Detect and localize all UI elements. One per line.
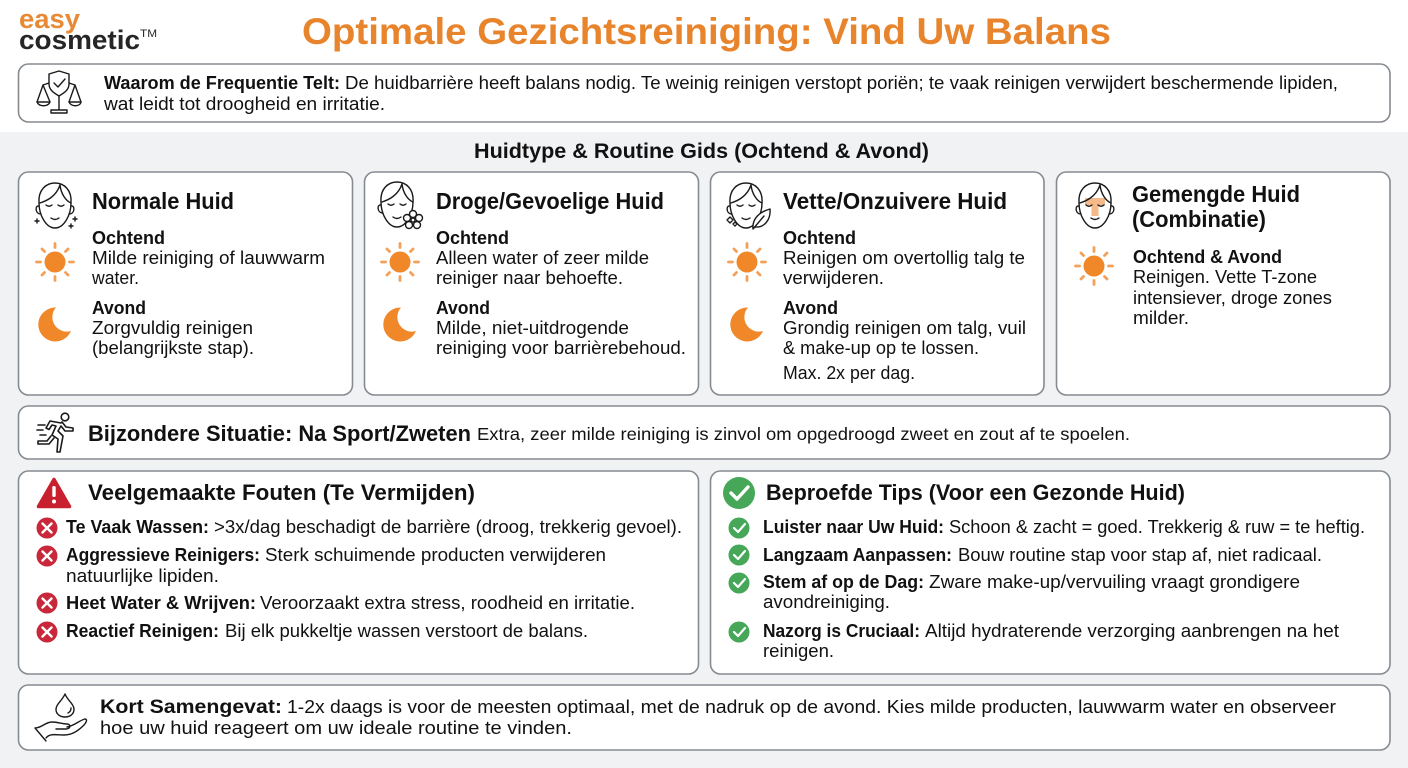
icon: shield and scales [37,71,81,113]
text: ochtend: Ochtend [783,228,856,248]
item: heet water en wrijven [36,592,635,614]
panel: bijzondere situatie [18,406,1390,459]
text: ochtend en avond: intensiever, droge zones [1133,288,1332,308]
text: na sport: Extra, zeer milde reiniging is zinvol om opgedroogd zweet en zout af te spoelen. [477,424,1130,444]
icon: sun [1076,248,1112,284]
icon: sun [728,244,766,280]
text: samenvatting [100,697,1336,738]
text: na sport: Bijzondere Situatie: Na Sport/Zweten [88,421,471,446]
item: langzaam aanpassen: Langzaam Aanpassen: [763,545,952,565]
heading: tips: Beproefde Tips (Voor een Gezonde Huid) [766,480,1185,505]
item: luister naar uw huid: Luister naar Uw Huid: [763,517,944,537]
item: reactief reinigen: Bij elk pukkeltje wassen verstoort de balans. [225,621,588,641]
text: ochtend: Reinigen om overtollig talg te [783,248,1025,268]
item: stem af op de dag [728,572,1300,612]
text: avond: Zorgvuldig reinigen [92,318,253,338]
text: waarom: De huidbarrière heeft balans nodig. Te weinig reinigen verstopt poriën; te vaak reinigen verwijdert beschermende lipiden, [345,73,1338,93]
text: na sport [88,421,1130,446]
text: avond: Milde, niet-uitdrogende [436,318,629,338]
panel: gemengde huid [1056,172,1390,395]
icon: moon [730,307,763,341]
item: aggressieve reinigers: natuurlijke lipiden. [66,566,219,586]
logo: cosmetic [19,25,140,55]
item: luister naar uw huid: Schoon & zacht = goed. Trekkerig & ruw = te heftig. [949,517,1365,537]
text: ochtend: Ochtend [436,228,509,248]
text: waarom [103,73,1338,114]
text: avond: Max. 2x per dag. [783,363,915,383]
item: stem af op de dag: avondreiniging. [763,592,890,612]
icon: hand with water drop [35,694,87,741]
text: avond [92,298,254,358]
text: avond: Grondig reinigen om talg, vuil [783,318,1026,338]
icon: sun [382,244,418,280]
item: reactief reinigen [36,621,588,642]
text: waarom: wat leidt tot droogheid en irritatie. [103,94,385,114]
panel: droge/gevoelige huid [364,172,698,395]
logo: easy [19,4,80,34]
text: ochtend: Ochtend [92,228,165,248]
text: avond: (belangrijkste stap). [92,338,254,358]
panel: kort samengevat [18,685,1390,750]
heading: vette/onzuivere huid: Vette/Onzuivere Huid [783,188,1007,214]
icon: face with flower [378,182,422,228]
icon: moon [383,307,416,341]
text: ochtend en avond: milder. [1133,308,1189,328]
icon: large check [723,477,755,509]
text: samenvatting: hoe uw huid reageert om uw ideale routine te vinden. [100,718,572,738]
heading: gemengde huid [1132,181,1300,232]
section heading: Huidtype & Routine Gids (Ochtend & Avond) [474,140,929,163]
text: ochtend [783,228,1025,288]
item: nazorg is cruciaal [728,621,1339,661]
item: luister naar uw huid [728,517,1365,538]
text: avond: reiniging voor barrièrebehoud. [436,338,686,358]
panel: normale huid [18,172,352,395]
text: ochtend: water. [91,268,139,288]
heading: droge/gevoelige huid: Droge/Gevoelige Huid [436,188,664,214]
text: samenvatting: 1-2x daags is voor de meesten optimaal, met de nadruk op de avond. Kies milde producten, lauwwarm water en observeer [287,697,1336,717]
item: stem af op de dag: Zware make-up/vervuiling vraagt grondigere [929,572,1300,592]
item: nazorg is cruciaal: Altijd hydraterende verzorging aanbrengen na het [925,621,1339,641]
item: reactief reinigen: Reactief Reinigen: [66,621,219,641]
logo: TM [140,28,157,40]
text: avond: Avond [92,298,146,318]
item: aggressieve reinigers: Aggressieve Reinigers: [66,545,260,565]
item: nazorg is cruciaal: Nazorg is Cruciaal: [763,621,920,641]
icon: moon [38,307,71,341]
item: heet water en wrijven: Veroorzaakt extra stress, roodheid en irritatie. [260,593,635,613]
heading: gemengde huid: (Combinatie) [1132,206,1266,232]
text: samenvatting: Kort Samengevat: [100,697,282,718]
text: ochtend: Milde reiniging of lauwwarm [92,248,325,268]
text: avond: Avond [783,298,838,318]
item: stem af op de dag: Stem af op de Dag: [763,572,924,592]
text: ochtend [91,228,325,288]
icon: face with t-zone [1076,183,1114,228]
item: te vaak wassen: Te Vaak Wassen: [66,517,209,537]
text: avond: & make-up op te lossen. [783,338,979,358]
text: ochtend en avond: Reinigen. Vette T-zone [1133,267,1317,287]
item: te vaak wassen: >3x/dag beschadigt de barrière (droog, trekkerig gevoel). [214,517,682,537]
text: ochtend: Alleen water of zeer milde [436,248,649,268]
icon: runner [37,413,73,452]
icon: face with sparkles [35,183,77,228]
panel: waarom de frequentie telt [18,64,1390,122]
text: avond [436,298,686,358]
item: nazorg is cruciaal: reinigen. [763,641,834,661]
item: aggressieve reinigers: Sterk schuimende producten verwijderen [265,545,606,565]
logo [19,4,157,55]
text: avond: Avond [436,298,490,318]
text: avond [783,298,1026,383]
text: ochtend: verwijderen. [783,268,884,288]
item: langzaam aanpassen: Bouw routine stap voor stap af, niet radicaal. [958,545,1322,565]
panel: beproefde tips [710,471,1390,674]
heading: gemengde huid: Gemengde Huid [1132,181,1300,207]
panel: vette/onzuivere huid [710,172,1044,395]
text: ochtend en avond: Ochtend & Avond [1133,247,1282,267]
icon: sun [36,244,74,280]
title: Optimale Gezichtsreiniging: Vind Uw Balans [302,11,1111,52]
item: te vaak wassen [36,517,682,538]
text: ochtend [436,228,649,288]
item: heet water en wrijven: Heet Water & Wrijven: [66,593,256,613]
text: ochtend en avond [1133,247,1332,328]
item: aggressieve reinigers [36,545,606,586]
icon: warning triangle [38,480,70,506]
heading: fouten: Veelgemaakte Fouten (Te Vermijden) [88,480,475,505]
text: ochtend: reiniger naar behoefte. [436,268,623,288]
heading: normale huid: Normale Huid [92,188,234,214]
item: langzaam aanpassen [728,544,1322,566]
panel: veelgemaakte fouten [18,471,698,674]
icon: face with leaf [727,183,770,229]
text: waarom: Waarom de Frequentie Telt: [104,73,340,93]
